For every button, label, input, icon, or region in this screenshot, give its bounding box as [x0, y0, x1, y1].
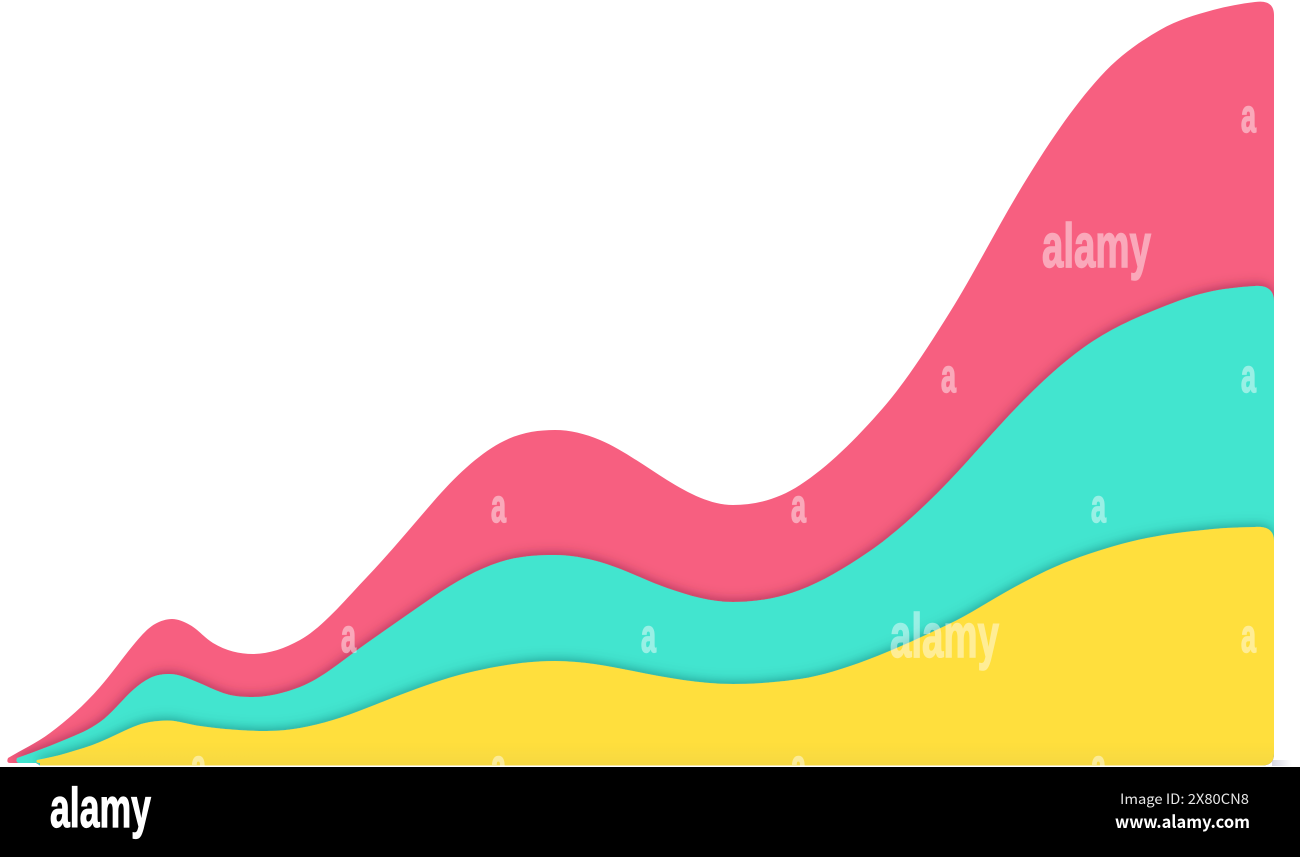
- watermark: small letter marks: a: [1241, 609, 1256, 662]
- website: www.alamy.com: [1115, 808, 1250, 833]
- watermark: large alamy marks: alamy: [890, 602, 999, 671]
- watermark: large alamy marks: [890, 212, 1151, 671]
- watermark: small letter marks: a: [941, 349, 956, 402]
- image id: Image ID: 2X80CN8: [1120, 789, 1249, 809]
- watermark: small letter marks: a: [641, 609, 656, 662]
- footer logo: alamy: [50, 776, 151, 839]
- watermark: small letter marks: [191, 89, 1256, 792]
- watermark: small letter marks: a: [791, 739, 806, 792]
- watermark: large alamy marks: alamy: [1042, 212, 1151, 281]
- area: yellow layer: [36, 527, 1274, 766]
- footer band: [0, 767, 1300, 857]
- watermark: small letter marks: a: [1091, 479, 1106, 532]
- area: teal layer: [16, 286, 1274, 766]
- watermark: small letter marks: a: [491, 479, 506, 532]
- watermark: small letter marks: a: [341, 609, 356, 662]
- watermark: small letter marks: a: [1091, 739, 1106, 792]
- watermark: small letter marks: a: [1241, 89, 1256, 142]
- ground shadow: [1272, 760, 1292, 766]
- watermark: small letter marks: a: [791, 479, 806, 532]
- watermark: small letter marks: a: [491, 739, 506, 792]
- watermark: small letter marks: a: [1241, 349, 1256, 402]
- watermark: small letter marks: a: [191, 739, 206, 792]
